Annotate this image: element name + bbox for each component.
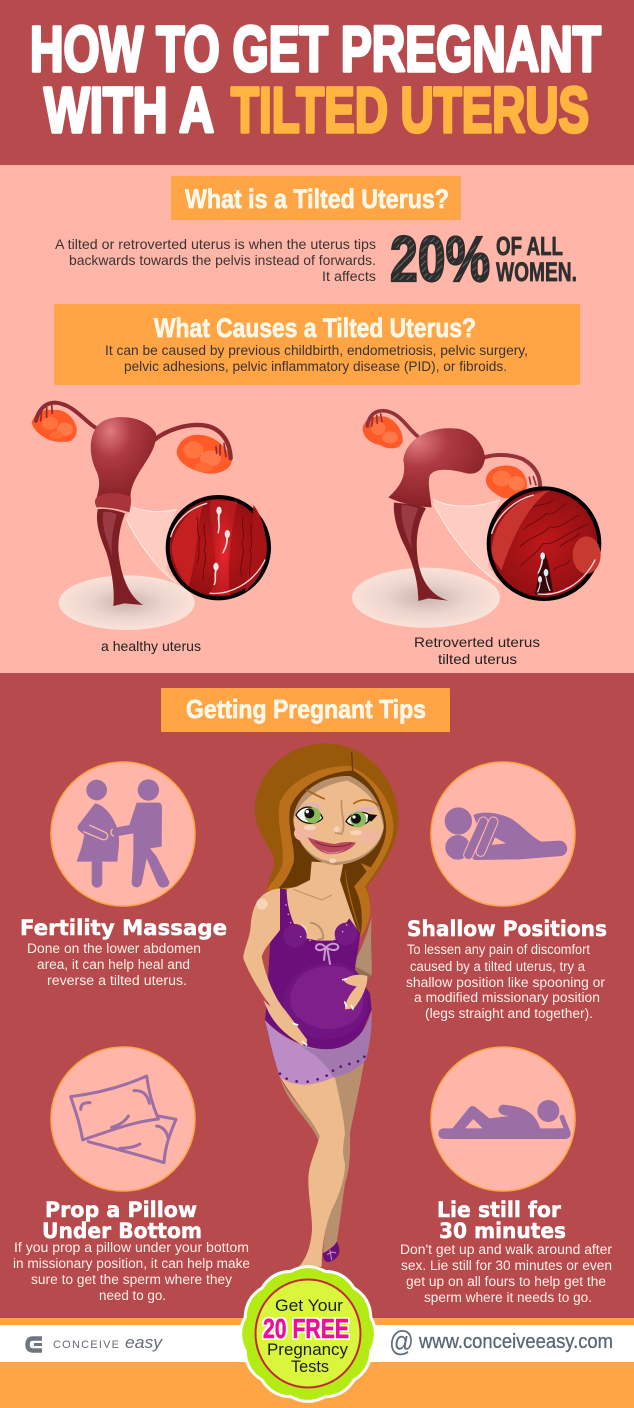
tip: lie still for 30 minutes: get up on all fours to help get the [406,1274,606,1289]
statistic: 20% of all women: WOMEN. [496,257,577,287]
website address: @ [389,1326,414,1358]
panel: tips section background [0,673,634,1318]
tip: prop a pillow: need to go. [99,1288,166,1303]
badge: 20 free pregnancy tests: Get Your [275,1297,344,1315]
icon: pillows [51,1047,195,1191]
panel: what causes a tilted uterus: It can be caused by previous childbirth, endometriosis, pelvic surgery, [105,342,528,358]
tip: lie still for 30 minutes: sex. Lie still for 30 minutes or even [401,1258,612,1273]
tip: lie still for 30 minutes: Don't get up and walk around after [400,1242,613,1257]
panel: what causes a tilted uterus: pelvic adhesions, pelvic inflammatory disease (PID), or fibroids. [124,358,507,374]
tip: prop a pillow: If you prop a pillow under your bottom [14,1240,249,1255]
header band [0,0,634,165]
tip: lie still for 30 minutes: sperm where it needs to go. [424,1290,592,1305]
logo: conceive easy: CONCEIVE [53,1339,119,1351]
badge: 20 free pregnancy tests [241,1267,375,1401]
heading: What is a Tilted Uterus [171,176,461,220]
tip: prop a pillow [13,1047,250,1303]
logo: conceive easy: easy [125,1333,164,1352]
tip: lie still for 30 minutes: 30 minutes [439,1219,566,1243]
text block: definition: It affects [322,268,376,284]
icon: person lying down [431,1047,575,1191]
text block: definition: A tilted or retroverted uterus is when the uterus tips [55,236,376,252]
heading: getting pregnant tips: Getting Pregnant Tips [186,694,426,724]
tip: fertility massage: area, it can help heal and [37,957,190,972]
tip: shallow positions: (legs straight and together). [425,1006,593,1021]
website address: www.conceiveeasy.com [418,1331,613,1353]
tip: shallow positions: To lessen any pain of discomfort [407,942,590,957]
badge: 20 free pregnancy tests: 20 FREE [263,1313,349,1344]
website address [389,1326,613,1358]
illustration: healthy uterus [32,403,269,630]
statistic: 20% of all women: OF ALL [496,231,563,261]
tip: shallow positions: a modified missionary position [414,990,600,1005]
illustration: retroverted uterus [352,411,601,628]
icon: couple massage [51,762,195,906]
statistic: 20% of all women: 20% [390,223,490,295]
tip: fertility massage: Fertility Massage [20,916,227,940]
panel: what causes a tilted uterus [54,304,580,385]
heading: getting pregnant tips [161,688,450,732]
tip: fertility massage: reverse a tilted uterus. [47,973,187,988]
footer band [0,1318,634,1408]
label: retroverted uterus: Retroverted uterus [414,634,540,650]
label: a healthy uterus: a healthy uterus [101,638,201,654]
label: retroverted uterus: tilted uterus [438,651,517,667]
text block: definition [55,236,376,284]
tip: fertility massage [20,762,227,988]
tip: fertility massage: Done on the lower abdomen [27,941,201,956]
illustration: pregnant woman [243,743,398,1267]
tip: lie still for 30 minutes [400,1047,613,1305]
tip: prop a pillow: Prop a Pillow [45,1198,197,1222]
tip: shallow positions [406,762,607,1021]
tip: shallow positions: Shallow Positions [407,917,607,941]
panel: what causes a tilted uterus: What Causes a Tilted Uterus? [154,313,476,343]
badge: 20 free pregnancy tests: Tests [291,1358,329,1376]
tip: shallow positions: shallow position like spooning or [406,975,606,990]
text block: definition: backwards towards the pelvis instead of forwards. [69,252,376,268]
title: WITH A [44,74,214,146]
title [30,13,601,146]
tip: prop a pillow: Under Bottom [42,1219,202,1243]
label: retroverted uterus [414,634,540,667]
logo: conceive easy [28,1333,164,1352]
heading: What is a Tilted Uterus: What is a Tilted Uterus? [185,184,449,214]
tip: prop a pillow: in missionary position, it can help make [13,1256,250,1271]
icon: spooning couple [431,762,575,906]
badge: 20 free pregnancy tests: Pregnancy [267,1341,349,1359]
statistic: 20% of all women [390,223,577,295]
tip: prop a pillow: sure to get the sperm where they [31,1272,232,1287]
tip: lie still for 30 minutes: Lie still for [437,1198,562,1222]
tip: shallow positions: caused by a tilted uterus, try a [410,959,585,974]
